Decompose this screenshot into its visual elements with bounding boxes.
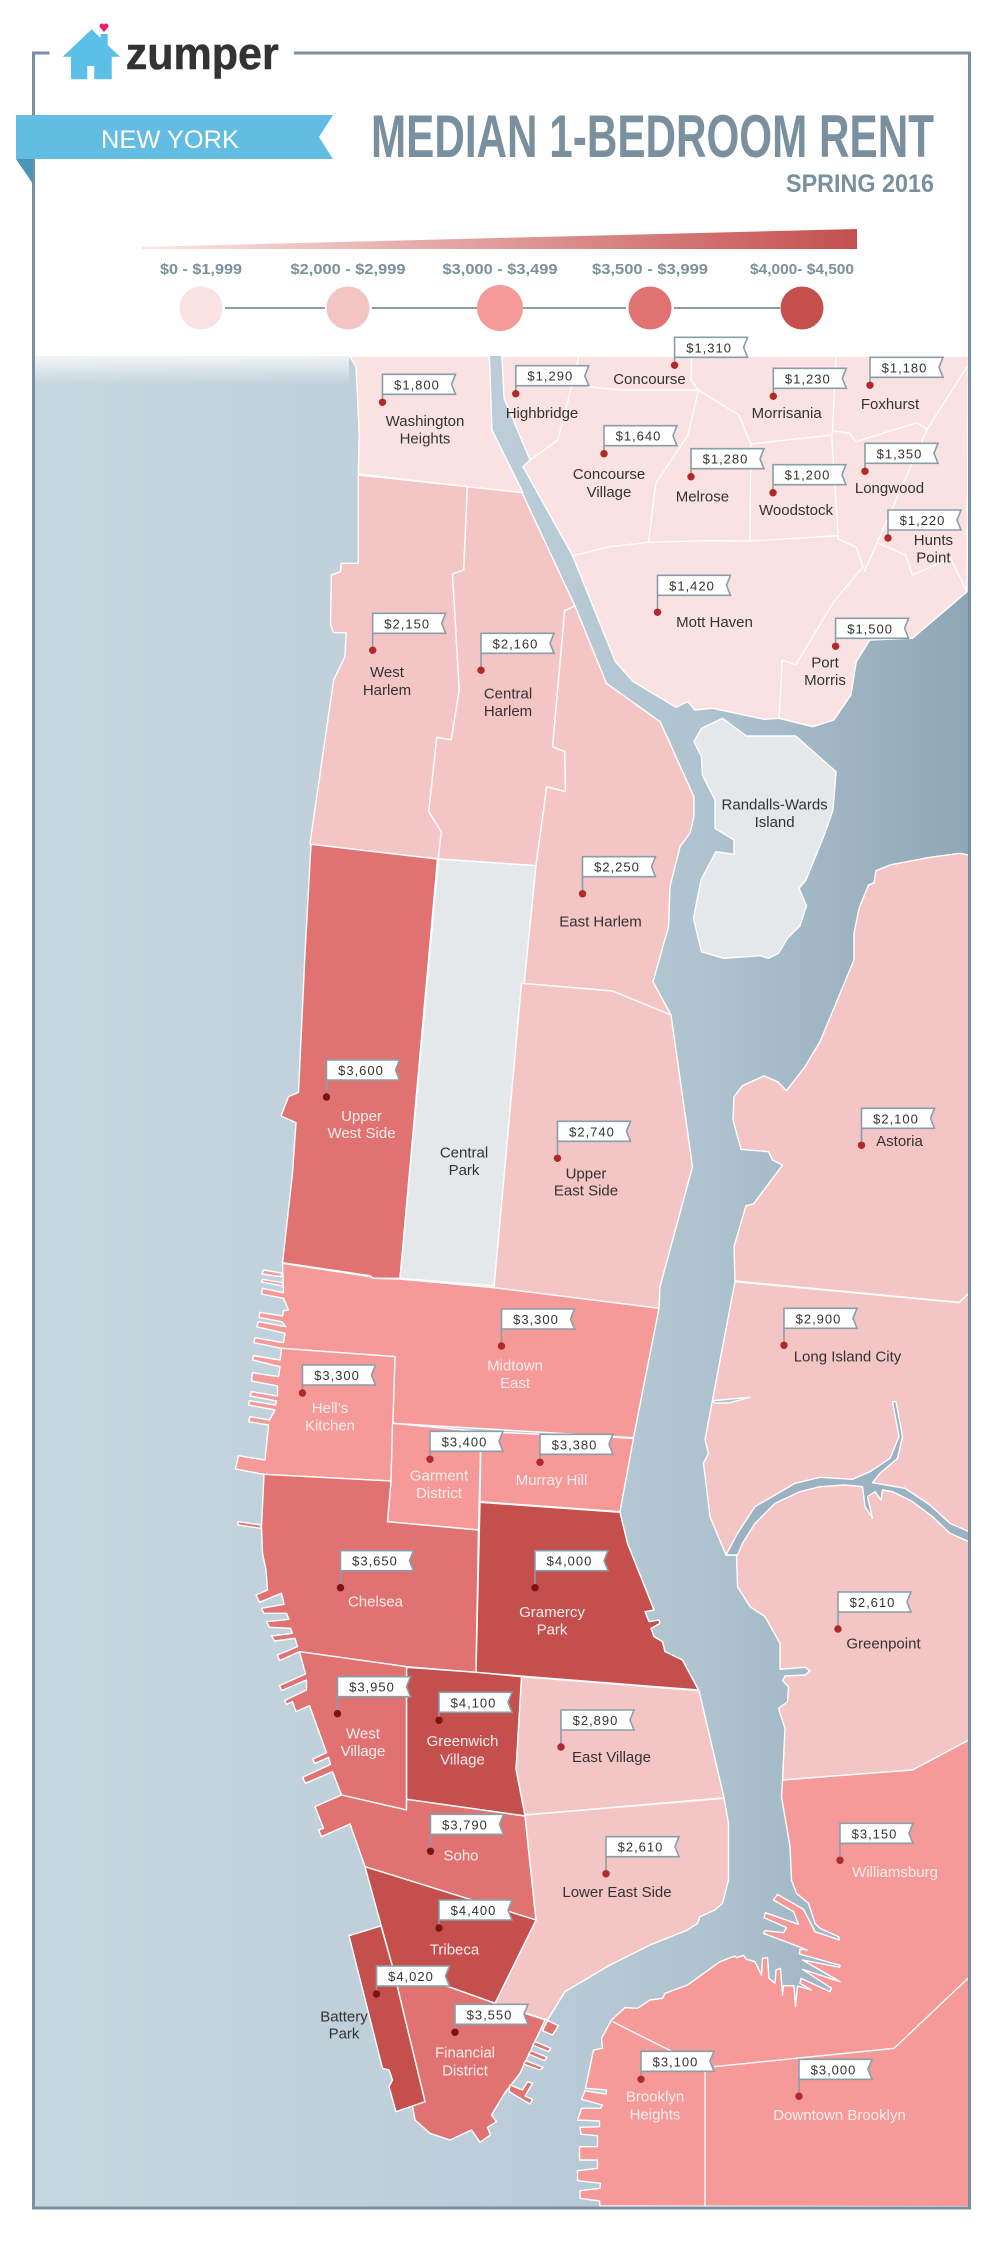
flag: Greenpoint: $2,610: [850, 1595, 895, 1610]
flag: Morrisania: $1,230: [785, 371, 831, 386]
region: Tribeca: [365, 1867, 536, 2003]
flag: Gramercy Park: [531, 1551, 608, 1591]
region: Central Park: [400, 859, 536, 1286]
flag: Foxhurst: [866, 357, 943, 389]
flag: Foxhurst: $1,180: [882, 360, 927, 375]
name: Garment District: District: [416, 1485, 463, 1502]
flag: Longwood: $1,350: [877, 446, 922, 461]
name: Central Park: Park: [449, 1162, 480, 1179]
legend colour dots: [180, 285, 824, 331]
region: Upper West Side: [281, 844, 438, 1278]
region: West Harlem: [310, 475, 467, 859]
flag: Port Morris: $1,500: [847, 621, 893, 636]
flag: Mott Haven: $1,420: [669, 578, 715, 593]
region: Murray Hill: [480, 1432, 634, 1512]
region: Washington Heights: [349, 356, 523, 493]
Brooklyn neighbourhood boundaries: [612, 1977, 969, 2207]
subtitle: SPRING 2016: [786, 170, 934, 198]
name: Midtown East: East: [500, 1375, 531, 1392]
region: Lower East Side: [495, 1798, 728, 2020]
name: Central Park: Central: [440, 1145, 488, 1162]
flag: Hell's Kitchen: [299, 1365, 376, 1397]
region: Long Island City and Greenpoint land: [704, 1282, 969, 1780]
name: Concourse Village: Concourse: [573, 466, 645, 483]
flag: Garment District: [426, 1431, 503, 1463]
name: Battery Park: Battery: [320, 2008, 368, 2025]
flag: West Harlem: [369, 613, 446, 654]
name: Gramercy Park: Gramercy: [519, 1604, 585, 1621]
map: New York neighbourhood rents: [34, 356, 970, 2208]
legend ranges: $2,000 - $2,999: [290, 261, 406, 278]
region: Upper East Side: [494, 983, 692, 1308]
name: East Harlem: East Harlem: [559, 913, 642, 930]
name: Upper East Side: Upper: [566, 1165, 606, 1182]
legend ranges: [160, 261, 854, 278]
flag: East Harlem: [579, 857, 656, 897]
flag: Greenwich Village: $4,100: [451, 1695, 496, 1710]
name: Melrose: Melrose: [676, 489, 729, 506]
logo: zumper: [63, 23, 279, 79]
name: Morrisania: Morrisania: [752, 405, 822, 422]
name: Brooklyn Heights: Heights: [630, 2106, 680, 2123]
ribbon fold: [16, 159, 33, 184]
name: Chelsea: Chelsea: [348, 1594, 404, 1611]
flag: Brooklyn Heights: [637, 2051, 714, 2083]
flag: Woodstock: [769, 465, 846, 496]
name: Woodstock: Woodstock: [759, 502, 833, 519]
legend ranges: $3,500 - $3,999: [592, 261, 708, 278]
flag: Financial District: [451, 2004, 528, 2036]
icon: house: [63, 29, 120, 79]
flag: Long Island City: $2,900: [796, 1311, 841, 1326]
region: Battery Park: [349, 1926, 425, 2112]
ribbon body: [16, 115, 333, 159]
flag: Lower East Side: $2,610: [618, 1840, 663, 1855]
small inlet: [712, 1397, 750, 1403]
ribbon text: NEW YORK: [101, 126, 239, 154]
flag: Washington Heights: [379, 374, 456, 406]
name: Washington Heights: Heights: [400, 430, 450, 448]
ribbon: New York: [16, 115, 333, 184]
region group: Upper Manhattan and Astoria: [281, 844, 969, 1308]
region: Financial District: [392, 1967, 545, 2142]
name: East Village: East Village: [572, 1749, 651, 1766]
flag: Upper East Side: $2,740: [569, 1124, 615, 1139]
name: Hell's Kitchen: Hell’s: [312, 1400, 348, 1417]
flag: Concourse Village: [600, 426, 677, 457]
name: Concourse: Concourse: [613, 371, 686, 388]
flag: Downtown Brooklyn: $3,000: [811, 2062, 856, 2077]
region: Garment District: [388, 1423, 481, 1530]
region group: Lower Manhattan and Brooklyn: [315, 1740, 969, 2207]
flag: Williamsburg: [836, 1823, 913, 1864]
flag: Melrose: $1,280: [703, 452, 748, 467]
flag: Lower East Side: [602, 1837, 679, 1877]
flag: Battery Park: $4,020: [388, 1969, 434, 1984]
flag: Washington Heights: $1,800: [394, 377, 440, 392]
name: Greenpoint: Greenpoint: [846, 1636, 921, 1653]
flag: Port Morris: [832, 618, 909, 650]
name: West Harlem: Harlem: [363, 682, 411, 699]
name: Randalls-Wards Island: Island: [755, 814, 795, 831]
flag: Morrisania: [770, 368, 846, 400]
name: Gramercy Park: Park: [537, 1621, 568, 1638]
region: West Village: [280, 1652, 406, 1810]
flag: Upper West Side: $3,600: [338, 1063, 384, 1078]
flag: East Village: [557, 1710, 634, 1751]
region: Hell's Kitchen: [236, 1348, 395, 1481]
name: Central Harlem: Harlem: [484, 703, 532, 720]
flag: Long Island City: [780, 1308, 857, 1349]
name: Highbridge: Highbridge: [506, 405, 578, 422]
name: Financial District: Financial: [435, 2045, 495, 2062]
name: Greenwich Village: Village: [440, 1751, 485, 1768]
icon: heart: [100, 23, 108, 32]
flag: Astoria: $2,100: [873, 1111, 919, 1126]
flag: East Village: $2,890: [573, 1713, 618, 1728]
flag: Soho: $3,790: [442, 1817, 488, 1832]
name: Midtown East: Midtown: [487, 1357, 543, 1374]
water background: [34, 356, 970, 2208]
name: Concourse Village: Village: [587, 484, 631, 501]
top fade of the water: [34, 356, 349, 384]
flag: Greenwich Village: [435, 1692, 512, 1724]
name: Upper East Side: East Side: [554, 1183, 618, 1200]
region: Brooklyn, Williamsburg and Downtown: [578, 1740, 969, 2207]
name: Hunts Point: Point: [916, 550, 951, 567]
legend ranges: $4,000- $4,500: [750, 261, 854, 278]
piers: upper Midtown: [262, 1270, 282, 1286]
name: Mott Haven: Mott Haven: [676, 614, 753, 631]
neighbourhood flags and names: [299, 337, 961, 2124]
name: Murray Hill: Murray Hill: [516, 1472, 587, 1489]
flag: Soho: [427, 1814, 504, 1855]
name: Astoria: Astoria: [876, 1133, 923, 1150]
Newtown Creek: [726, 1402, 969, 1555]
flag: Downtown Brooklyn: [795, 2059, 872, 2100]
flag: West Harlem: $2,150: [384, 616, 430, 631]
flag: West Village: [334, 1677, 410, 1717]
flag: Chelsea: [337, 1551, 414, 1591]
name: Upper West Side: West Side: [327, 1125, 396, 1142]
region: Randalls-Wards Island: [694, 718, 836, 958]
flag: Chelsea: $3,650: [352, 1554, 398, 1569]
name: Washington Heights: Washington: [386, 413, 464, 430]
flag: Greenpoint: [834, 1592, 911, 1633]
flag: Concourse: $1,310: [686, 340, 732, 355]
region group: Bronx and Harlem: [310, 356, 968, 866]
flag: Hunts Point: $1,220: [900, 513, 945, 528]
name: Garment District: Garment: [410, 1468, 469, 1485]
name: Upper West Side: Upper: [341, 1108, 382, 1125]
flag: Garment District: $3,400: [442, 1434, 487, 1449]
flag: Woodstock: $1,200: [785, 468, 830, 483]
flag: Astoria: [858, 1108, 934, 1149]
region: Soho: [315, 1795, 536, 1920]
flag: Highbridge: $1,290: [527, 369, 573, 384]
name: West Harlem: West: [370, 664, 405, 681]
legend: [142, 229, 857, 331]
flag: Battery Park: [373, 1966, 450, 1998]
name: Long Island City: Long Island City: [794, 1349, 902, 1366]
name: Soho: Soho: [443, 1848, 479, 1865]
flag: West Village: $3,950: [349, 1680, 395, 1695]
flag: Williamsburg: $3,150: [852, 1826, 897, 1841]
name: Lower East Side: Lower East Side: [562, 1884, 672, 1901]
region: East Harlem: [522, 606, 694, 1015]
flag: Concourse Village: $1,640: [616, 429, 661, 444]
region: Midtown East: [254, 1263, 659, 1438]
flag: Central Harlem: [477, 633, 554, 674]
name: Port Morris: Port: [811, 655, 840, 672]
region: Central Harlem: [429, 487, 575, 866]
flag: Central Harlem: $2,160: [493, 636, 538, 651]
piers: Financial District: [509, 2021, 558, 2104]
region: Gramercy Park: [476, 1502, 698, 1690]
wordmark: zumper: [126, 28, 279, 79]
name: Longwood: Longwood: [855, 480, 924, 497]
name: Port Morris: Morris: [804, 672, 846, 689]
region: Astoria: [733, 853, 969, 1302]
name: Downtown Brooklyn: Downtown Brooklyn: [773, 2107, 906, 2124]
flag: Brooklyn Heights: $3,100: [653, 2054, 698, 2069]
name: Williamsburg: Williamsburg: [852, 1864, 938, 1881]
flag: Mott Haven: [654, 575, 730, 616]
region: East Village: [516, 1677, 724, 1815]
name: West Village: West: [346, 1726, 381, 1743]
region: Greenwich Village: [406, 1667, 525, 1816]
legend wedge: [142, 229, 857, 249]
legend ranges: $3,000 - $3,499: [442, 261, 558, 278]
flag: Hell's Kitchen: $3,300: [314, 1368, 360, 1383]
name: Randalls-Wards Island: Randalls-Wards: [722, 796, 828, 813]
name: Battery Park: Park: [329, 2026, 360, 2043]
flag: Murray Hill: [536, 1434, 613, 1466]
flag: Longwood: [861, 443, 938, 475]
name: Tribeca: Tribeca: [430, 1941, 480, 1958]
flag: Upper West Side: [323, 1060, 400, 1101]
flag: Highbridge: [512, 366, 589, 397]
name: Hunts Point: Hunts: [914, 532, 953, 549]
flag: East Harlem: $2,250: [594, 860, 640, 875]
name: Central Harlem: Central: [484, 686, 532, 703]
legend connector lines: [225, 307, 780, 309]
name: West Village: Village: [341, 1743, 385, 1760]
flag: Midtown East: [498, 1309, 574, 1350]
flag: Tribeca: $4,400: [451, 1903, 496, 1918]
flag: Murray Hill: $3,380: [552, 1437, 597, 1452]
pier: Chelsea north: [238, 1522, 261, 1528]
legend ranges: $0 - $1,999: [160, 261, 242, 278]
name: Hell's Kitchen: Kitchen: [305, 1417, 355, 1434]
flag: Hunts Point: [884, 510, 961, 542]
region group: Midtown, Chelsea, Long Island City, Greenpoint: [236, 1263, 969, 1816]
region: Chelsea: [256, 1474, 478, 1672]
name: Foxhurst: Foxhurst: [861, 396, 920, 413]
flag: Melrose: [687, 449, 764, 480]
flag: Gramercy Park: $4,000: [547, 1554, 592, 1569]
flag: Concourse: [671, 337, 748, 369]
name: Financial District: District: [442, 2062, 489, 2079]
region: Bronx: [502, 356, 968, 727]
flag: Upper East Side: [554, 1121, 630, 1162]
flag: Tribeca: [435, 1900, 512, 1932]
flag: Midtown East: $3,300: [513, 1312, 559, 1327]
name: Greenwich Village: Greenwich: [427, 1733, 498, 1750]
flag: Financial District: $3,550: [467, 2007, 512, 2022]
Bronx neighbourhood boundaries: [530, 356, 967, 718]
name: Brooklyn Heights: Brooklyn: [626, 2089, 684, 2106]
